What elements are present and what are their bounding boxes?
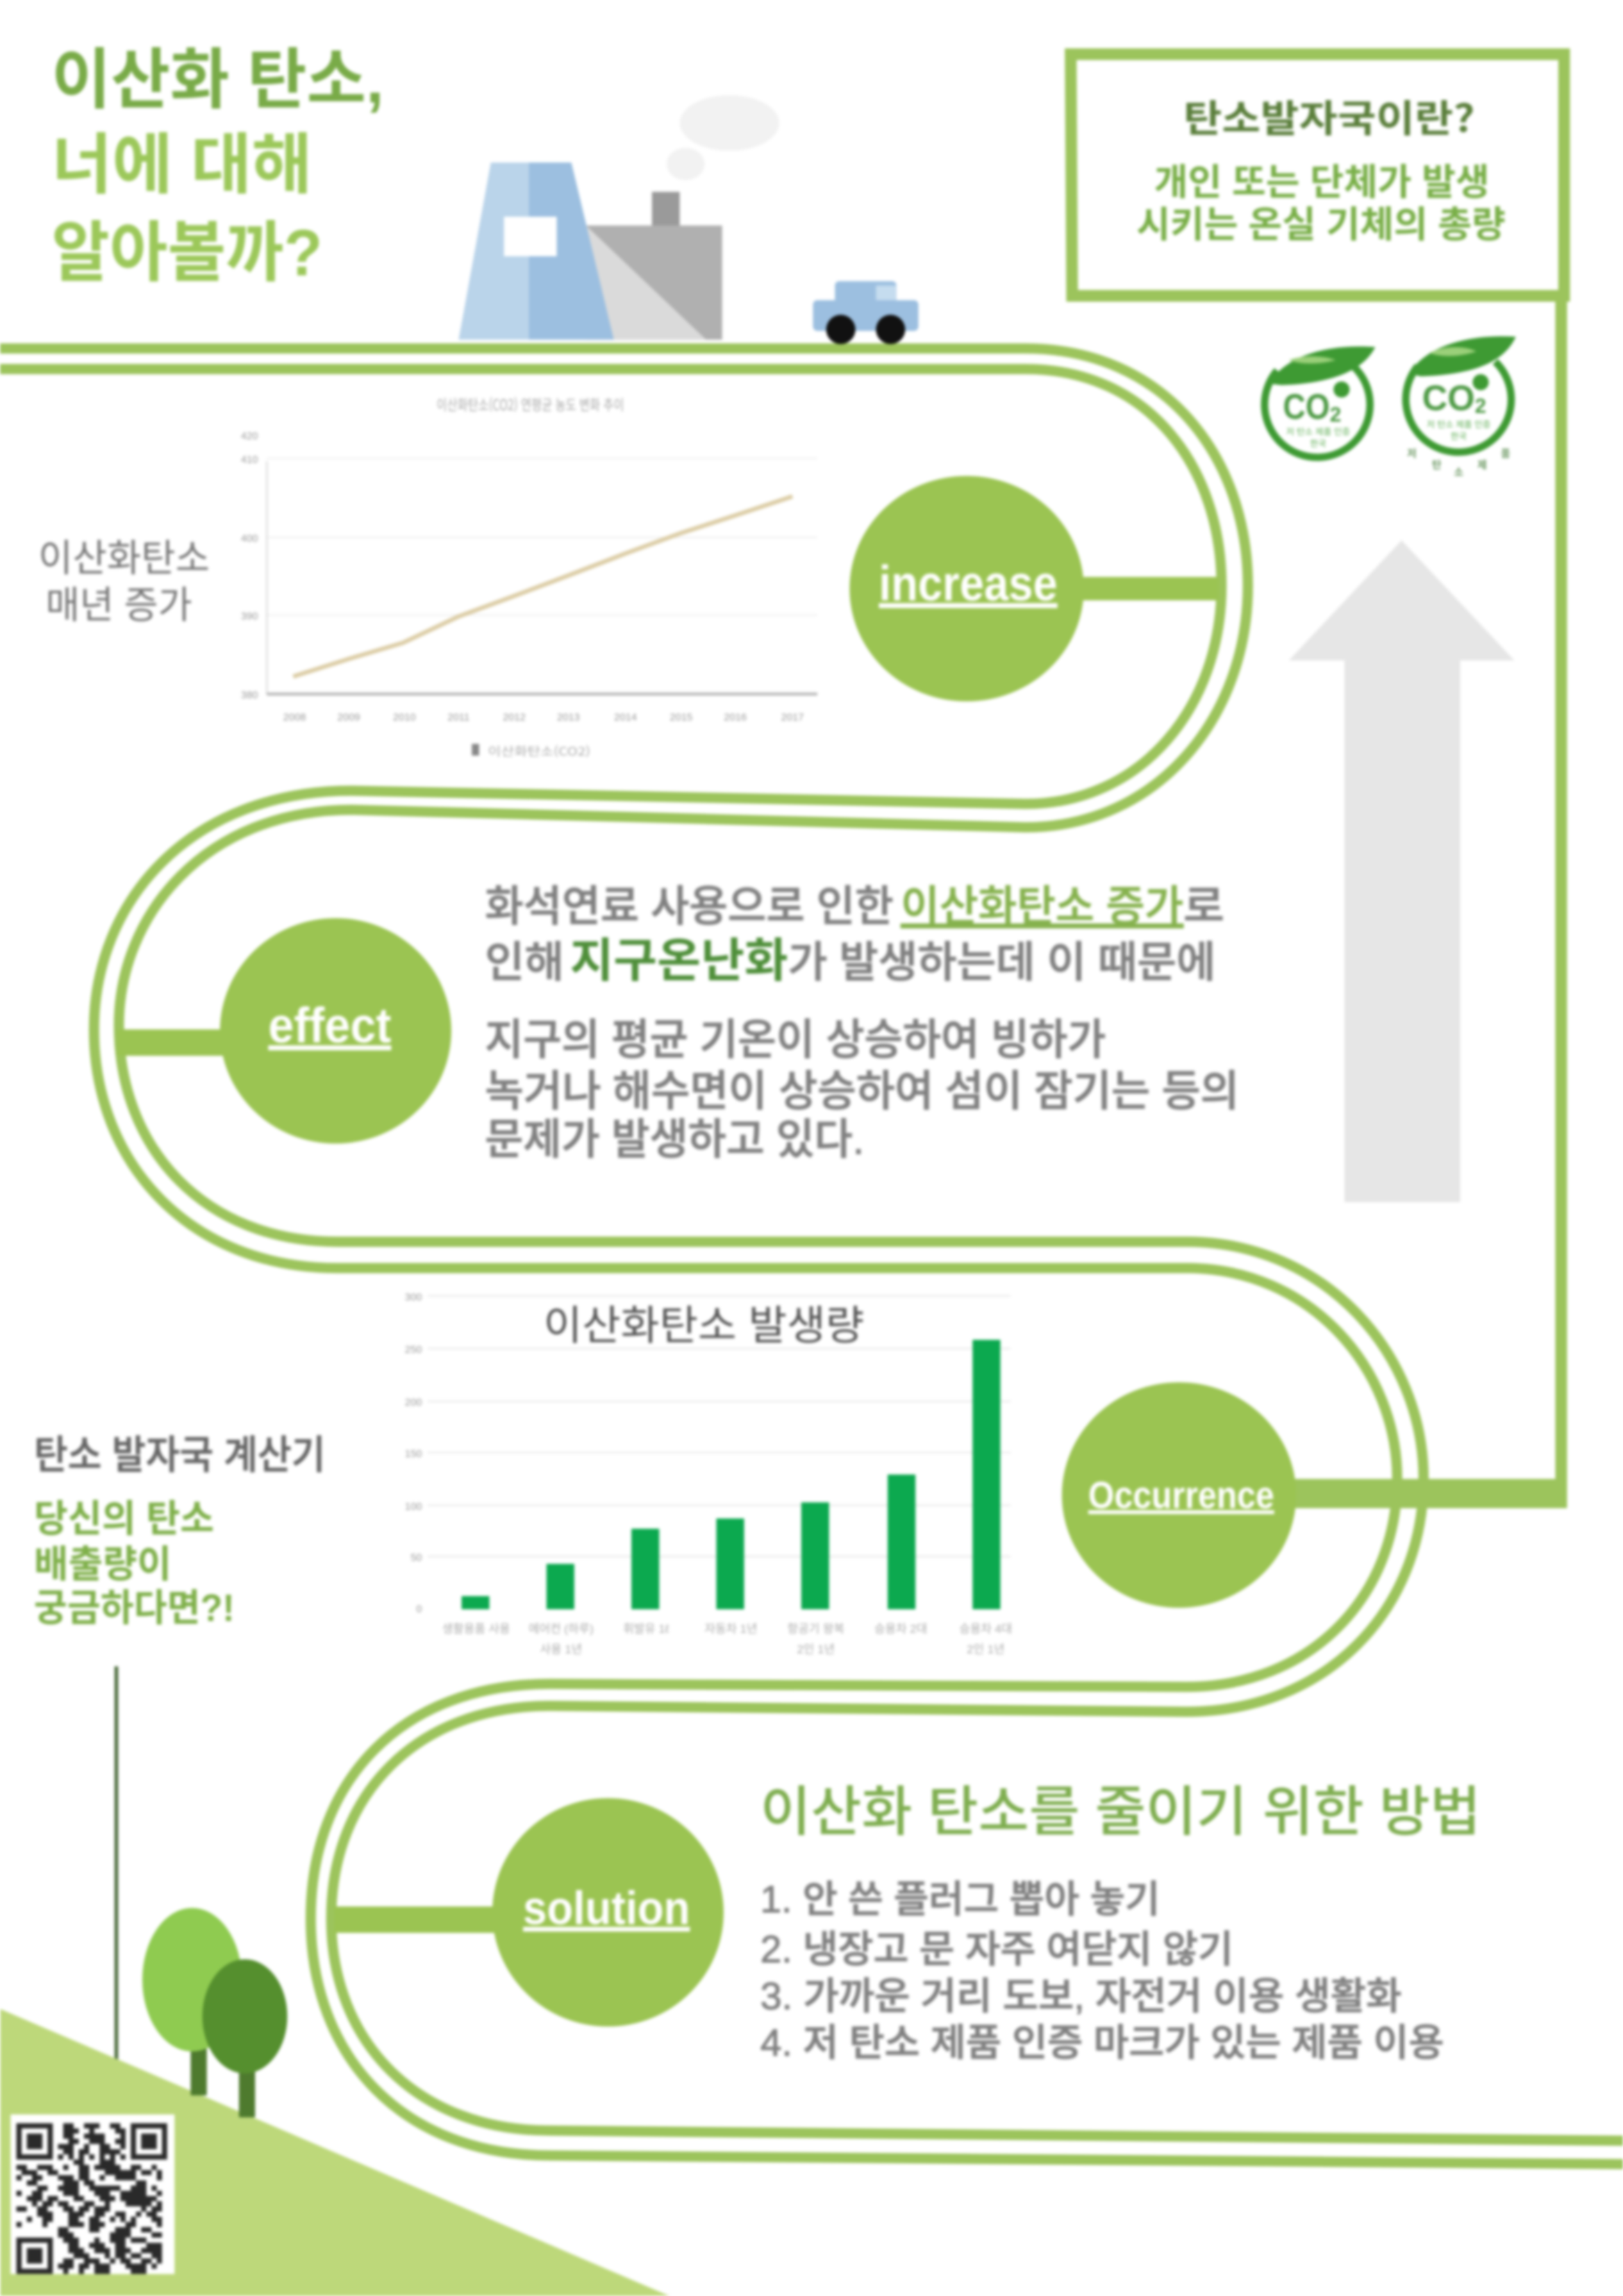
bar chart x labels: 에어컨 (하루) xyxy=(528,1622,594,1636)
road line two xyxy=(0,369,1623,2164)
x axis labels: 2009 xyxy=(338,712,360,723)
bar chart x labels: 사용 1년 xyxy=(540,1642,582,1656)
text block: effect description: 이산화탄소 증가 xyxy=(901,883,1183,930)
bar chart y labels: 200 xyxy=(405,1397,422,1408)
x axis labels: 2015 xyxy=(669,712,692,723)
text block: effect description: 로 xyxy=(1183,883,1224,930)
road line one xyxy=(0,349,1623,2141)
bar chart x labels xyxy=(442,1622,1012,1656)
icon: CO2 badge one: CO xyxy=(1283,387,1330,426)
title xyxy=(51,44,384,290)
text block: effect description: 문제가 발생하고 있다. xyxy=(485,1115,864,1163)
factory building xyxy=(586,192,722,340)
cooling tower xyxy=(458,163,614,340)
title: 너에 대해 xyxy=(51,128,313,202)
badge two certification marks: 제 xyxy=(1477,460,1487,472)
y axis labels: 410 xyxy=(241,454,258,465)
text block: effect description: 가 발생하는데 이 때문에 xyxy=(788,938,1215,985)
panel text: 개인 또는 단체가 발생 xyxy=(1154,162,1490,203)
x axis labels xyxy=(283,712,804,723)
arrow: upward grey xyxy=(1289,540,1515,1202)
text block: carbon footprint calculator: 궁금하다면?! xyxy=(34,1586,235,1629)
node: occurrence: Occurrence xyxy=(1088,1474,1274,1517)
x axis labels: 2012 xyxy=(503,712,526,723)
x axis labels: 2014 xyxy=(614,712,637,723)
x axis labels: 2016 xyxy=(724,712,747,723)
title: 알아볼까? xyxy=(51,216,322,290)
bar chart y labels xyxy=(405,1292,422,1615)
text block: effect description xyxy=(485,883,1239,1163)
bar chart y labels: 150 xyxy=(405,1449,422,1460)
line chart: CO2 concentration xyxy=(241,394,817,759)
icon: CO2 badge one: 저 탄소 제품 인증 xyxy=(1286,424,1350,438)
data line xyxy=(293,497,792,676)
text block: carbon footprint calculator: 배출량이 xyxy=(34,1542,172,1586)
node: effect: effect xyxy=(268,998,391,1054)
bar chart title: 이산화탄소 발생량 xyxy=(544,1293,864,1352)
panel text: 시키는 온실 기체의 총량 xyxy=(1137,205,1506,246)
text block: carbon footprint calculator: 당신의 탄소 xyxy=(34,1497,214,1540)
node: increase xyxy=(849,476,1219,701)
bar chart x labels: 2인 1년 xyxy=(797,1642,835,1656)
list: reduction methods: 3. 가까운 거리 도보, 자전거 이용 생활화 xyxy=(760,1974,1401,2018)
icon: CO2 badge two: 한국 xyxy=(1451,429,1467,442)
bar chart x labels: 승용차 4대 xyxy=(959,1622,1012,1636)
icon: CO2 badge one: 2 xyxy=(1330,404,1341,426)
vertical pointer line to QR xyxy=(115,1666,118,2069)
text block: effect description: 인해 xyxy=(485,938,564,985)
y axis labels: 390 xyxy=(241,611,258,622)
bar chart: CO2 emissions xyxy=(405,1292,1012,1656)
text block: effect description: 녹거나 해수면이 상승하여 섬이 잠기는 등의 xyxy=(485,1067,1239,1115)
list: reduction methods: 4. 저 탄소 제품 인증 마크가 있는 제품 이용 xyxy=(760,2021,1444,2064)
icon: CO2 badge two: CO xyxy=(1422,378,1475,417)
node: effect xyxy=(117,918,451,1144)
badge two certification marks: 탄 xyxy=(1432,460,1442,472)
panel text xyxy=(1137,162,1506,246)
x axis labels: 2011 xyxy=(448,712,469,723)
badge two certification marks: 소 xyxy=(1454,467,1463,479)
x axis labels: 2010 xyxy=(393,712,416,723)
panel heading: 탄소발자국이란? xyxy=(1183,88,1475,143)
icon: CO2 badge two: 2 xyxy=(1475,395,1486,418)
list: reduction methods xyxy=(760,1878,1444,2064)
text block: effect description: 지구온난화 xyxy=(570,935,788,987)
text block: effect description: 지구의 평균 기온이 상승하여 빙하가 xyxy=(485,1016,1106,1063)
bars xyxy=(462,1340,1000,1609)
bar chart y labels: 300 xyxy=(405,1292,422,1303)
title: 이산화 탄소, xyxy=(51,44,384,117)
badge two certification marks: 품 xyxy=(1501,448,1510,460)
icon: car xyxy=(813,281,918,344)
label: annual CO2 increase xyxy=(38,536,210,626)
panel: carbon footprint definition xyxy=(1071,54,1564,296)
QR code xyxy=(10,2115,174,2274)
node: increase: increase xyxy=(879,556,1058,611)
icon: CO2 badge two xyxy=(1406,336,1516,479)
bar chart x labels: 항공기 왕복 xyxy=(788,1622,844,1636)
heading: ways to reduce CO2: 이산화 탄소를 줄이기 위한 방법 xyxy=(760,1769,1481,1847)
text block: effect description: 화석연료 사용으로 인한 xyxy=(485,883,894,930)
x axis labels: 2013 xyxy=(557,712,580,723)
node: solution: solution xyxy=(523,1882,690,1934)
list: reduction methods: 1. 안 쓴 플러그 뽑아 놓기 xyxy=(760,1878,1160,1921)
node: occurrence xyxy=(1062,1382,1296,1608)
icon: CO2 badge one: 한국 xyxy=(1310,436,1326,449)
x axis labels: 2008 xyxy=(283,712,306,723)
badge two certification marks xyxy=(1407,448,1510,479)
bar chart y labels: 250 xyxy=(405,1345,422,1356)
bar chart x labels: 생활용품 사용 xyxy=(442,1622,510,1636)
bar chart y labels: 50 xyxy=(410,1553,422,1564)
grid and axes xyxy=(267,458,817,694)
badge two certification marks: 저 xyxy=(1407,448,1417,460)
bar chart y labels: 100 xyxy=(405,1501,422,1513)
illustration: factory xyxy=(458,95,779,340)
x axis labels: 2017 xyxy=(781,712,804,723)
bar chart x labels: 자동차 1년 xyxy=(704,1622,758,1636)
winding road track xyxy=(0,349,1623,2164)
label: annual CO2 increase: 이산화탄소 xyxy=(38,536,210,579)
bar chart x labels: 2인 1년 xyxy=(967,1642,1005,1656)
factory smoke xyxy=(667,95,779,180)
bar chart x labels: 승용차 2대 xyxy=(874,1622,927,1636)
hill xyxy=(0,2009,669,2296)
y axis labels xyxy=(241,431,258,701)
text block: carbon footprint calculator: 탄소 발자국 계산기 xyxy=(34,1433,326,1478)
y axis labels: 380 xyxy=(241,690,258,701)
bar chart y labels: 0 xyxy=(416,1604,422,1615)
panel frame xyxy=(1071,54,1564,296)
icon: CO2 badge two: 저 탄소 제품 인증 xyxy=(1426,417,1490,431)
vertical connector to panel xyxy=(1296,300,1564,1505)
icon: trees xyxy=(142,1908,288,2118)
node: solution xyxy=(334,1798,724,2027)
label: annual CO2 increase: 매년 증가 xyxy=(46,583,192,626)
text block: carbon footprint calculator xyxy=(34,1433,326,1629)
bar chart grid xyxy=(428,1296,1010,1556)
bar chart x labels: 휘발유 1ℓ xyxy=(623,1622,669,1636)
chart legend: 이산화탄소(CO2) xyxy=(488,742,590,759)
y axis labels: 420 xyxy=(241,431,258,442)
icon: CO2 badge one xyxy=(1265,347,1375,458)
chart title: 이산화탄소(CO2) 연평균 농도 변화 추이 xyxy=(437,394,624,415)
list: reduction methods: 2. 냉장고 문 자주 여닫지 않기 xyxy=(760,1927,1233,1970)
y axis labels: 400 xyxy=(241,533,258,544)
